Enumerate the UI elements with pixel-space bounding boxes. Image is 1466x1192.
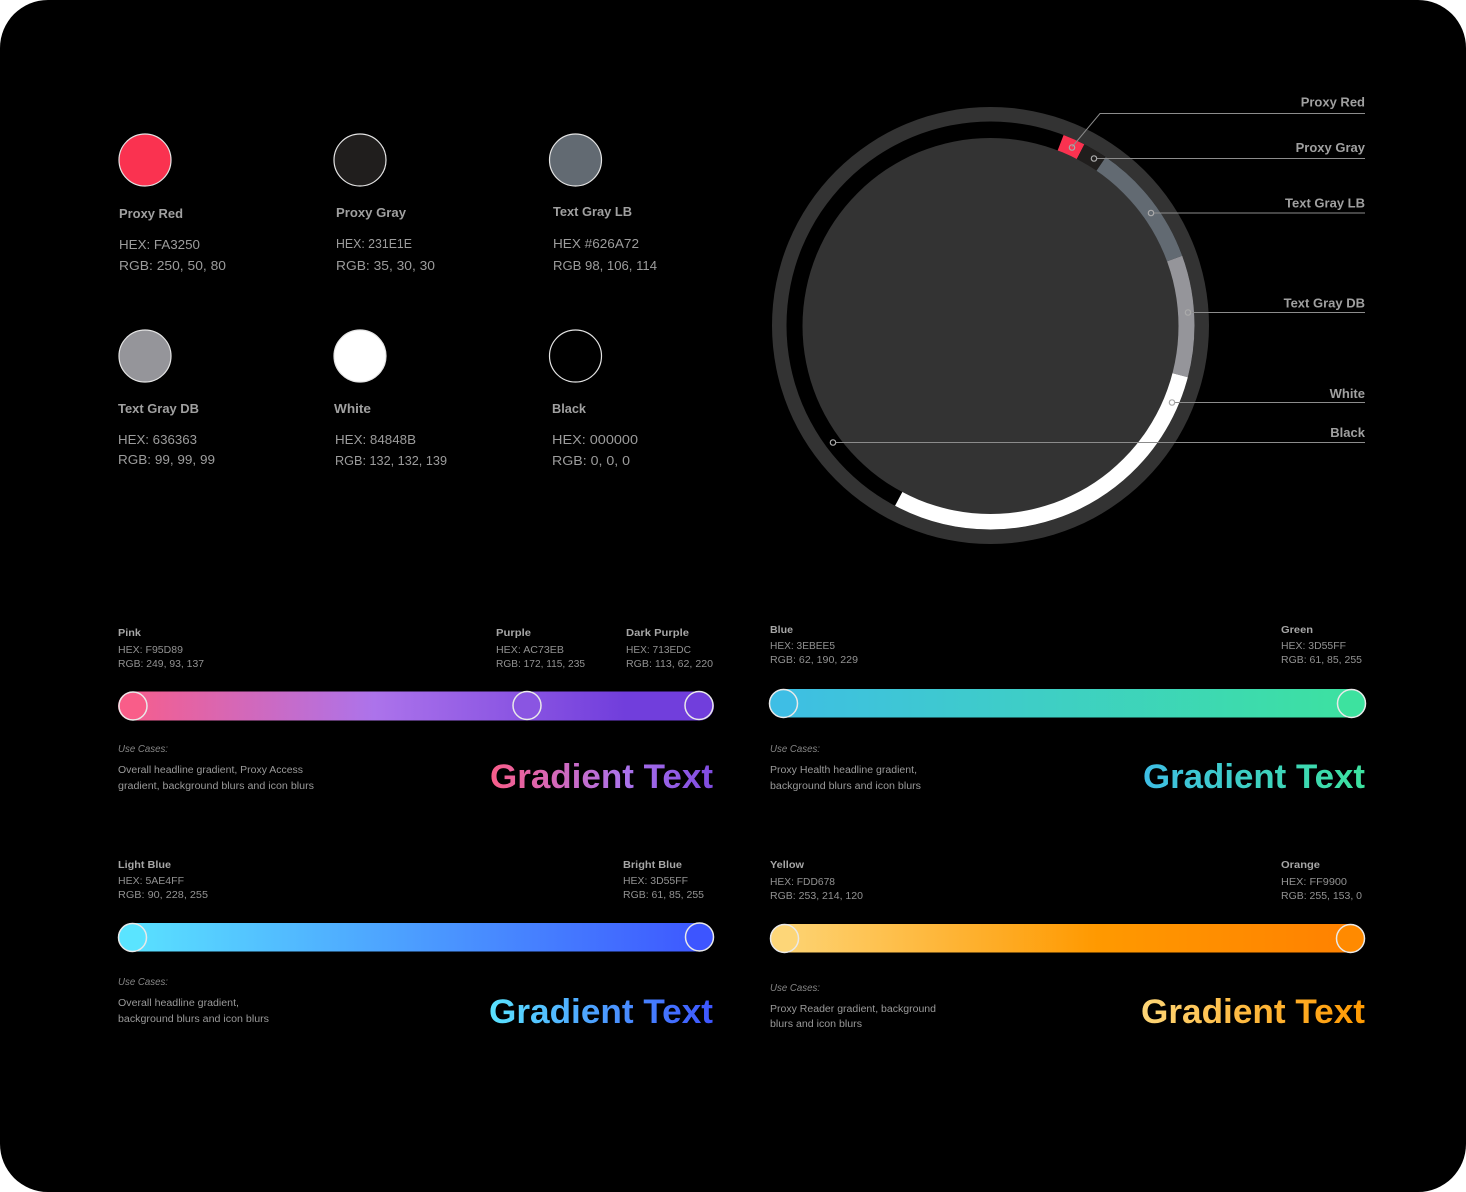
swatch: Text Gray DB: HEX: 636363	[118, 432, 197, 447]
gradient panel: yellow to orange: Use Cases:	[770, 983, 820, 994]
callout: Proxy Gray: Proxy Gray	[1296, 140, 1366, 155]
swatch: Proxy Red	[119, 134, 226, 273]
swatch: White: RGB: 132, 132, 139	[335, 453, 447, 468]
gradient panel: pink to purple: RGB: 113, 62, 220	[626, 659, 713, 670]
gradient panel: blue to green: Use Cases:	[770, 744, 820, 755]
gradient panel: blue to green: Gradient Text	[1143, 758, 1366, 796]
gradient panel: light blue to bright blue	[118, 860, 714, 1031]
swatch: Proxy Gray: Proxy Gray	[336, 205, 407, 220]
gradient panel: yellow to orange: HEX: FF9900	[1281, 877, 1347, 888]
callout: Black	[830, 425, 1366, 445]
gradient panel: blue to green: RGB: 61, 85, 255	[1281, 655, 1362, 666]
gradient panel: pink to purple: gradient, background blurs and icon blurs	[118, 781, 314, 792]
gradient panel: pink to purple	[118, 628, 714, 796]
swatch: Proxy Red: HEX: FA3250	[119, 237, 200, 252]
gradient panel: light blue to bright blue: Overall headline gradient,	[118, 998, 239, 1009]
gradient panel: light blue to bright blue: Light Blue	[118, 860, 171, 871]
callout: Black: Black	[1330, 425, 1366, 440]
gradient panel: light blue to bright blue: Gradient Text	[489, 993, 714, 1031]
swatch: Black: HEX: 000000	[552, 432, 638, 447]
gradient panel: light blue to bright blue: HEX: 5AE4FF	[118, 876, 184, 887]
callout: Proxy Red: Proxy Red	[1301, 94, 1365, 110]
swatch: Black	[550, 330, 638, 468]
gradient panel: blue to green	[769, 625, 1366, 796]
callout: White: White	[1330, 386, 1365, 401]
swatch: Proxy Red: RGB: 250, 50, 80	[119, 258, 226, 273]
gradient panel: pink to purple: Purple	[496, 628, 531, 639]
swatch: Text Gray LB: RGB 98, 106, 114	[553, 258, 657, 273]
gradient panel: blue to green: Proxy Health headline gradient,	[770, 765, 917, 776]
gradient panel: pink to purple: HEX: F95D89	[118, 645, 183, 656]
swatch: Proxy Gray: HEX: 231E1E	[336, 236, 412, 251]
swatch: White	[334, 330, 447, 468]
donut chart: colour proportions	[772, 107, 1209, 544]
gradient panel: blue to green: HEX: 3D55FF	[1281, 641, 1346, 652]
gradient panel: pink to purple: RGB: 172, 115, 235	[496, 659, 585, 670]
gradient panel: pink to purple: Gradient Text	[490, 758, 714, 796]
swatch: Text Gray DB	[118, 330, 215, 467]
swatch: Text Gray LB: Text Gray LB	[553, 204, 632, 219]
callout: White	[1169, 386, 1365, 405]
gradient panel: light blue to bright blue: RGB: 61, 85, 255	[623, 890, 704, 901]
gradient panel: blue to green: RGB: 62, 190, 229	[770, 655, 858, 666]
gradient panel: light blue to bright blue: RGB: 90, 228, 255	[118, 890, 208, 901]
gradient panel: yellow to orange	[770, 860, 1366, 1031]
swatch: Black: RGB: 0, 0, 0	[552, 453, 630, 468]
swatch: White: HEX: 84848B	[335, 432, 416, 447]
callout: Text Gray LB: Text Gray LB	[1285, 196, 1365, 210]
swatch: Text Gray DB: Text Gray DB	[118, 401, 199, 416]
gradient panel: pink to purple: Dark Purple	[626, 628, 689, 639]
gradient panel: blue to green: HEX: 3EBEE5	[770, 641, 835, 652]
gradient panel: pink to purple: Use Cases:	[118, 744, 168, 755]
swatch: Text Gray DB: RGB: 99, 99, 99	[118, 452, 215, 467]
swatch: White: White	[334, 401, 371, 416]
callout: Text Gray DB: Text Gray DB	[1284, 296, 1365, 310]
gradient panel: pink to purple: HEX: AC73EB	[496, 645, 564, 656]
swatch: Proxy Gray: RGB: 35, 30, 30	[336, 258, 435, 273]
swatch: Black: Black	[552, 401, 587, 416]
gradient panel: light blue to bright blue: Use Cases:	[118, 977, 168, 988]
gradient panel: light blue to bright blue: background blurs and icon blurs	[118, 1014, 269, 1025]
gradient panel: light blue to bright blue: HEX: 3D55FF	[623, 876, 688, 887]
callout: Text Gray DB	[1185, 296, 1365, 315]
gradient panel: yellow to orange: Yellow	[770, 860, 804, 871]
gradient panel: yellow to orange: Proxy Reader gradient, background	[770, 1004, 936, 1015]
swatch: Proxy Red: Proxy Red	[119, 206, 183, 221]
gradient panel: yellow to orange: Gradient Text	[1141, 993, 1366, 1031]
gradient panel: pink to purple: Overall headline gradient, Proxy Access	[118, 765, 303, 776]
swatch: Proxy Gray	[334, 134, 435, 273]
gradient panel: blue to green: Blue	[770, 625, 793, 636]
swatch: Text Gray LB: HEX #626A72	[553, 236, 639, 251]
gradient panel: pink to purple: HEX: 713EDC	[626, 645, 691, 656]
callout: Text Gray LB	[1148, 196, 1365, 216]
gradient panel: yellow to orange: blurs and icon blurs	[770, 1019, 862, 1030]
swatch: Text Gray LB	[550, 134, 657, 273]
gradient panel: blue to green: Green	[1281, 625, 1313, 636]
gradient panel: yellow to orange: RGB: 253, 214, 120	[770, 891, 863, 902]
gradient panel: yellow to orange: HEX: FDD678	[770, 877, 835, 888]
callout: Proxy Gray	[1091, 140, 1366, 161]
callout: Proxy Red	[1069, 94, 1365, 150]
gradient panel: pink to purple: RGB: 249, 93, 137	[118, 659, 204, 670]
gradient panel: pink to purple: Pink	[118, 628, 141, 639]
gradient panel: light blue to bright blue: Bright Blue	[623, 860, 682, 871]
gradient panel: yellow to orange: Orange	[1281, 860, 1320, 871]
gradient panel: blue to green: background blurs and icon blurs	[770, 781, 921, 792]
gradient panel: yellow to orange: RGB: 255, 153, 0	[1281, 891, 1362, 902]
